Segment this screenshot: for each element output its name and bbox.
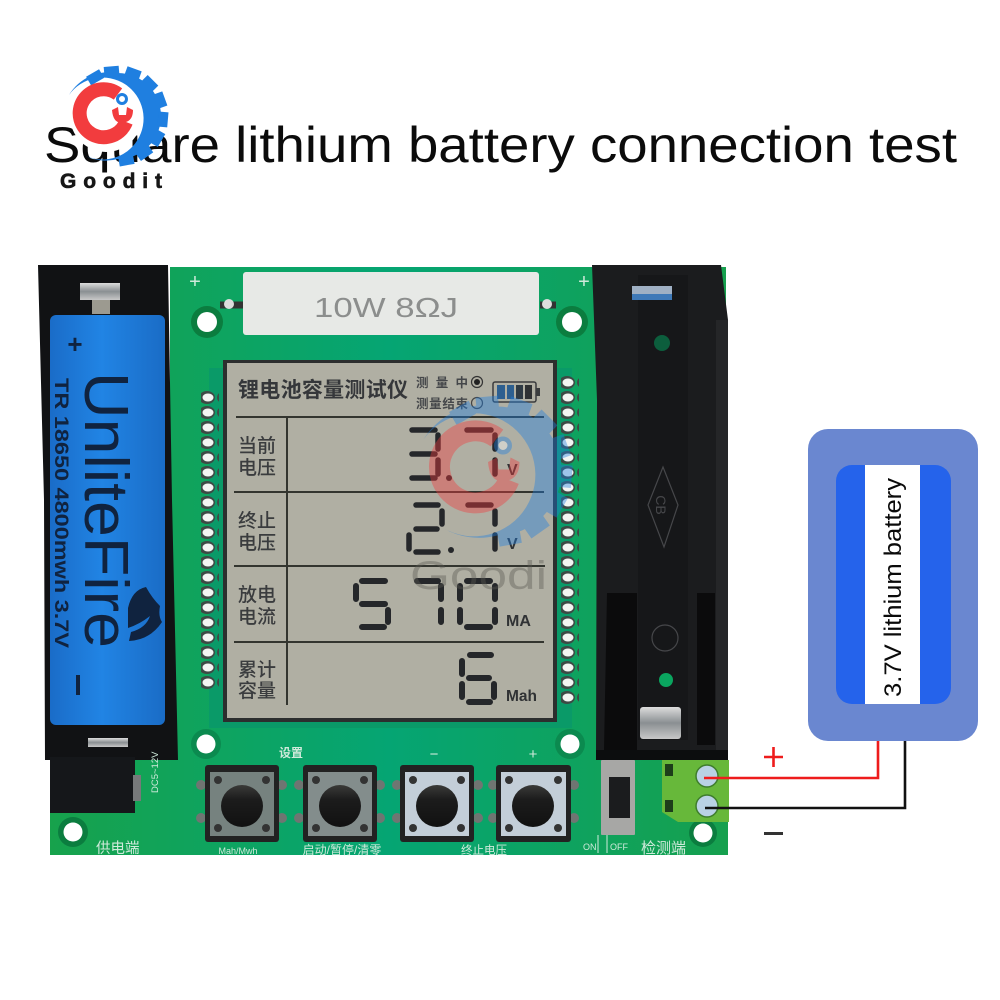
battery polarity (67, 329, 83, 695)
seven segment readout: 570 MA (356, 581, 495, 627)
power resistor (220, 272, 556, 335)
battery level icon (493, 382, 540, 402)
button pads (196, 780, 579, 823)
top contact (80, 283, 120, 314)
row labels: 放电 (238, 584, 276, 606)
board silkscreen labels: + (578, 271, 590, 293)
panel: circuit board (50, 267, 728, 855)
unit labels: MA (506, 613, 531, 630)
battery polarity: + (67, 329, 83, 359)
battery cell (50, 315, 165, 725)
push buttons (196, 765, 579, 842)
row labels: 容量 (238, 680, 276, 702)
unit labels: Mah (506, 688, 537, 705)
battery spec: TR 18650 4800mwh 3.7V (50, 378, 71, 648)
board silkscreen labels: 供电端 (96, 840, 140, 857)
board silkscreen labels: 终止电压 (461, 843, 507, 857)
logo: Goodit (60, 66, 169, 193)
power resistor: 10W 8ΩJ (314, 292, 458, 323)
button: start/pause (303, 765, 377, 842)
minus sign (764, 832, 783, 835)
row labels: 当前 (238, 435, 276, 457)
button: Mah/Mwh (205, 765, 279, 842)
board silkscreen labels: ON (583, 842, 596, 852)
board silkscreen labels: + (529, 746, 538, 763)
battery brand: UnliteFire (71, 372, 140, 648)
pin header left (201, 390, 219, 690)
panel: right battery holder (592, 265, 728, 760)
board silkscreen labels: 设置 (279, 746, 303, 760)
CB diamond mark: CB (653, 495, 669, 515)
board silkscreen labels: + (189, 271, 201, 293)
LCD footprint frame (209, 368, 572, 728)
board silkscreen labels: OFF (610, 842, 628, 852)
row labels: 终止 (238, 510, 276, 532)
bottom contact (88, 738, 128, 747)
green hole upper (654, 335, 670, 351)
green through hole (659, 673, 673, 687)
DC power jack (50, 757, 141, 813)
CB diamond mark (648, 467, 678, 651)
slide switch (601, 760, 635, 835)
board silkscreen labels: − (430, 746, 439, 763)
grid lines (234, 417, 545, 705)
row labels (238, 435, 276, 702)
arrow: red positive wire (704, 741, 878, 778)
panel: LCD display (223, 360, 557, 722)
LCD heading: 锂电池容量测试仪 (238, 378, 408, 402)
top contact (632, 286, 672, 300)
flame logo (128, 587, 162, 641)
board silkscreen labels: 启动/暂停/清零 (303, 842, 381, 857)
panel: left battery holder (38, 265, 178, 760)
board silkscreen labels: DC5~12V (150, 751, 161, 793)
seven segment readout: 2.7 V (409, 505, 495, 552)
battery label: 3.7V lithium battery (880, 478, 907, 697)
row labels: 电流 (238, 606, 276, 628)
board silkscreen labels (96, 271, 686, 857)
arrow: black negative wire (705, 741, 905, 808)
board silkscreen labels: Mah/Mwh (218, 846, 258, 856)
logo: Goodit: Goodit (60, 170, 162, 193)
seven segment readout: 3.7 V (412, 430, 495, 478)
button: minus (400, 765, 474, 842)
row labels: 累计 (238, 659, 276, 681)
pin header right (561, 375, 579, 705)
panel: 3.7V lithium battery (808, 429, 978, 741)
watermark logo: Goodi (410, 554, 547, 598)
unit labels (506, 462, 537, 705)
status labels (416, 375, 482, 411)
watermark logo (410, 396, 573, 598)
status labels: 测量结束 (416, 396, 468, 411)
button: plus (496, 765, 571, 842)
metal clip (640, 707, 681, 739)
screw terminal (662, 760, 729, 822)
row labels: 电压 (238, 457, 276, 479)
plus sign (764, 747, 783, 767)
row labels: 电压 (238, 532, 276, 554)
unit labels: V (507, 536, 518, 553)
unit labels: V (507, 462, 518, 479)
status labels: 测 量 中 (416, 375, 468, 390)
board silkscreen labels: 检测端 (641, 840, 686, 857)
mounting holes (58, 306, 717, 847)
seven segment readout: 6 Mah (462, 655, 494, 702)
title: Square lithium battery connection test (44, 117, 957, 173)
